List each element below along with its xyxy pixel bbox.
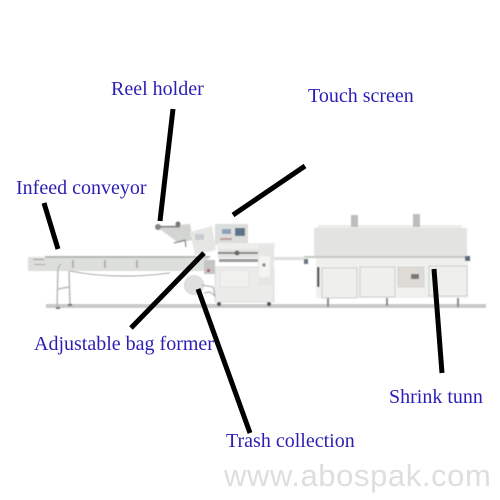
- flow wrapper body: [184, 224, 308, 306]
- line: shrink tunnel: [434, 269, 442, 373]
- label: adjustable bag former: Adjustable bag former: [34, 333, 214, 355]
- label: touch screen: Touch screen: [308, 85, 414, 107]
- line: infeed conveyor: [44, 203, 58, 249]
- pointer lines: [44, 109, 442, 433]
- label: shrink tunnel: Shrink tunn: [389, 386, 483, 408]
- label: trash collection: Trash collection: [226, 430, 355, 452]
- line: adjustable bag former: [131, 253, 204, 328]
- shrink tunnel: [304, 214, 470, 307]
- label: infeed conveyor: Infeed conveyor: [16, 177, 147, 199]
- floor shadow: [46, 304, 486, 308]
- line: reel holder: [160, 109, 173, 221]
- line: trash collection: [198, 289, 250, 433]
- label: reel holder: Reel holder: [111, 78, 204, 100]
- touch screen: [235, 228, 245, 236]
- machine illustration: [28, 214, 470, 309]
- watermark: www.abospak.com: [223, 458, 491, 493]
- infeed conveyor: [28, 256, 210, 309]
- reel holder: [155, 222, 216, 255]
- line: touch screen: [233, 166, 305, 215]
